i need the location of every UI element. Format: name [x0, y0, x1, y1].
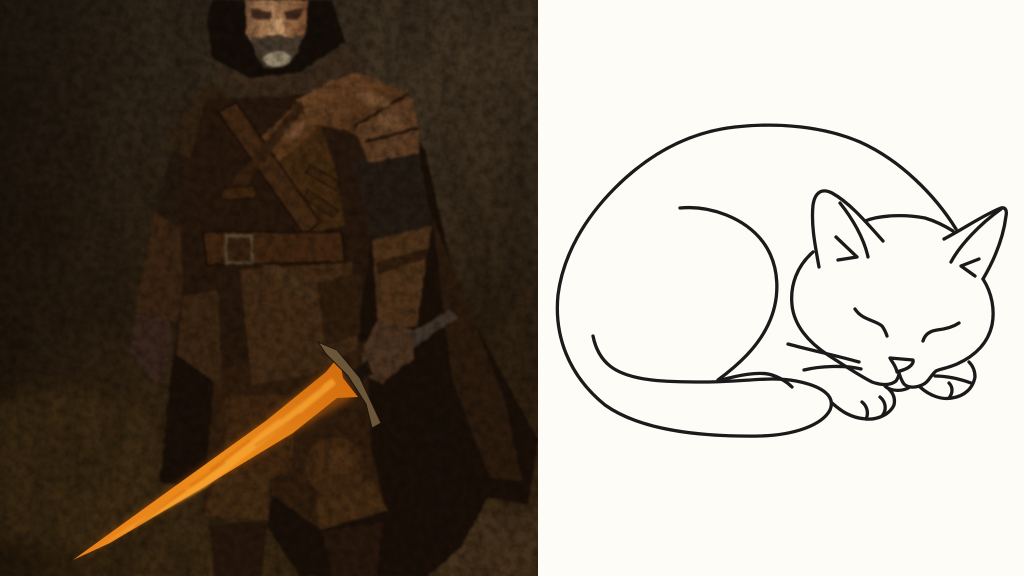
- painting background: [0, 0, 570, 576]
- left closed eye: [855, 309, 887, 336]
- chest horizontal straps: [222, 165, 340, 218]
- right closed eye: [923, 323, 959, 341]
- belt buckle: [226, 236, 252, 263]
- belt: [203, 232, 345, 265]
- beard highlights: [263, 51, 291, 67]
- left bracer: [136, 213, 183, 322]
- chest plate: [261, 105, 317, 162]
- sword: [73, 342, 381, 560]
- cat haunch: [680, 208, 777, 380]
- right pauldron lower: [355, 96, 420, 163]
- cape: [159, 144, 538, 576]
- right arm sleeve: [368, 155, 430, 238]
- right ear: [944, 208, 1006, 279]
- blade fuller highlight: [95, 378, 336, 549]
- panel: cream drawing background: [538, 0, 1024, 576]
- paw under chin: [886, 387, 910, 390]
- right ear inner: [951, 209, 1001, 262]
- tunic skirt left: [176, 290, 222, 388]
- cat tail overlap: [718, 373, 792, 387]
- cat head top: [865, 216, 953, 231]
- cat body outline: [557, 125, 956, 436]
- chest strap: [218, 102, 320, 236]
- blade: [73, 356, 358, 560]
- beard: [250, 34, 304, 68]
- brow and eye shadows: [250, 7, 304, 20]
- trousers light patch: [224, 394, 296, 478]
- left ear fold: [836, 237, 857, 260]
- upper whisker: [788, 344, 859, 362]
- knee guard: [306, 437, 364, 497]
- nose: [890, 358, 913, 372]
- right pauldron upper: [295, 72, 408, 136]
- right paw lines: [935, 376, 971, 398]
- crossguard: [318, 342, 381, 428]
- second strap: [231, 100, 306, 186]
- collar cape: [172, 85, 220, 158]
- left arm: [170, 154, 190, 198]
- pauldron seam: [354, 94, 418, 142]
- left hand: [132, 314, 170, 370]
- drawing: sleeping cat: [557, 125, 1006, 436]
- left ear: [812, 191, 883, 267]
- sword grip upper: [412, 309, 458, 347]
- panel: warrior painting: [0, 0, 570, 576]
- torso jacket: [181, 94, 370, 367]
- cat head left and chin: [792, 252, 899, 384]
- cape lit folds: [432, 215, 522, 480]
- armour highlights: [280, 88, 404, 474]
- nose: [268, 18, 286, 36]
- right ear fold: [961, 259, 979, 276]
- right tasset: [315, 480, 388, 530]
- left boot: [210, 520, 268, 576]
- face: [243, 0, 310, 44]
- belt pouch: [318, 274, 357, 344]
- bracer strap: [376, 248, 428, 274]
- lower belt strap: [262, 264, 280, 270]
- lower whisker: [804, 366, 861, 370]
- hood: [273, 70, 356, 98]
- cat head right and chin: [899, 279, 993, 387]
- front paw toes: [862, 397, 885, 419]
- leather grain: [0, 0, 538, 576]
- warrior figure: [130, 0, 538, 576]
- right boot: [322, 522, 383, 576]
- leg tassets: [205, 478, 270, 520]
- front paw: [832, 386, 894, 419]
- right bracer: [372, 226, 432, 328]
- tunic skirt centre: [240, 262, 358, 385]
- right paw: [920, 362, 975, 399]
- hand on sword: [361, 320, 414, 384]
- sword grip lower: [352, 360, 372, 384]
- hair: [207, 0, 345, 78]
- left ear inner: [840, 203, 868, 257]
- trousers: [202, 340, 385, 528]
- blade glow: [74, 362, 354, 560]
- blade mottled streaks: [135, 386, 322, 527]
